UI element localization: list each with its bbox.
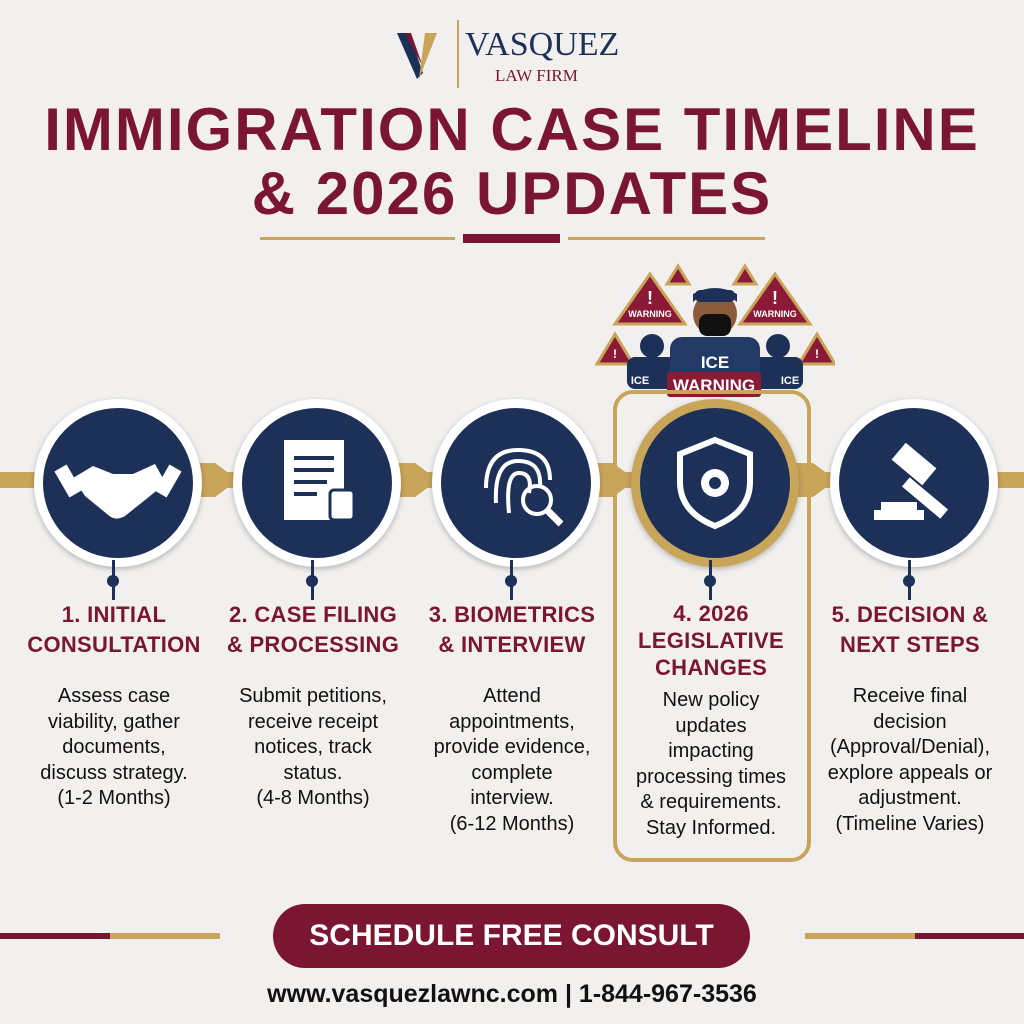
step 4 text bbox=[636, 601, 786, 838]
timeline bar bbox=[0, 472, 1024, 488]
step 4 icon: shield bbox=[631, 399, 799, 567]
step 4 text: CHANGES bbox=[655, 655, 767, 680]
step 3 text: & INTERVIEW bbox=[438, 632, 586, 657]
step 3 text: complete bbox=[471, 762, 553, 784]
step 2 text: Submit petitions, bbox=[239, 685, 387, 707]
step 5 icon: gavel bbox=[830, 399, 998, 567]
step 4 text: processing times bbox=[636, 766, 786, 788]
ICE warning illustration: ICE bbox=[701, 353, 729, 372]
step 1 text: discuss strategy. bbox=[40, 762, 188, 784]
ICE warning illustration: WARNING bbox=[673, 376, 755, 395]
ICE warning illustration: ! bbox=[613, 347, 617, 361]
step 4 text: impacting bbox=[668, 740, 754, 762]
step 4 text: 4. 2026 bbox=[673, 601, 749, 626]
footer contact: www.vasquezlawnc.com | 1-844-967-3536 bbox=[267, 980, 757, 1008]
logo bbox=[397, 20, 619, 88]
step 1 text: documents, bbox=[62, 736, 166, 758]
step 3 text: 3. BIOMETRICS bbox=[429, 602, 595, 627]
title bbox=[44, 96, 980, 227]
highlight box: step 4 bbox=[613, 390, 811, 862]
title: IMMIGRATION CASE TIMELINE bbox=[44, 96, 980, 163]
step 5 text: (Timeline Varies) bbox=[836, 812, 984, 834]
step 3 text: Attend bbox=[483, 685, 541, 707]
ICE warning illustration: WARNING bbox=[753, 309, 797, 319]
step 2 text: (4-8 Months) bbox=[256, 787, 370, 809]
step 2 text bbox=[227, 602, 399, 809]
step 3 icon: fingerprint bbox=[432, 399, 600, 567]
step 5 text: NEXT STEPS bbox=[840, 632, 980, 657]
step 1 text: viability, gather bbox=[48, 710, 180, 732]
step 4 text: New policy bbox=[663, 689, 759, 711]
logo: VASQUEZ bbox=[465, 26, 619, 63]
step 2 text: 2. CASE FILING bbox=[229, 602, 397, 627]
step 4 text: LEGISLATIVE bbox=[638, 628, 784, 653]
arrows bbox=[200, 463, 825, 497]
step 3 text: interview. bbox=[470, 787, 554, 809]
step 3 text bbox=[429, 602, 595, 834]
step 1 text: 1. INITIAL bbox=[62, 602, 166, 627]
step 3 text: (6-12 Months) bbox=[450, 812, 574, 834]
step 4 text: Stay Informed. bbox=[646, 816, 776, 838]
step 2 icon: document bbox=[233, 399, 401, 567]
step 5 text: Receive final bbox=[853, 685, 967, 707]
step 5 text: (Approval/Denial), bbox=[830, 736, 990, 758]
CTA button bbox=[273, 904, 750, 968]
step 1 icon: handshake bbox=[34, 399, 202, 567]
step 1 text: (1-2 Months) bbox=[57, 787, 171, 809]
step 4 text: & requirements. bbox=[640, 791, 782, 813]
step 1 text: Assess case bbox=[58, 685, 170, 707]
ICE warning illustration: ! bbox=[647, 288, 653, 308]
ICE warning illustration: ICE bbox=[781, 375, 799, 387]
step 5 text bbox=[828, 602, 992, 834]
step 5 text: 5. DECISION & bbox=[832, 602, 988, 627]
step 5 text: adjustment. bbox=[858, 787, 962, 809]
step 5 text: decision bbox=[873, 710, 947, 732]
step 4 text: updates bbox=[675, 714, 747, 736]
step 1 text bbox=[27, 602, 201, 809]
step 3 text: appointments, bbox=[449, 710, 575, 732]
step 3 text: provide evidence, bbox=[434, 736, 590, 758]
ICE warning illustration: ICE bbox=[631, 375, 649, 387]
step 1 text: CONSULTATION bbox=[27, 632, 201, 657]
step 2 text: & PROCESSING bbox=[227, 632, 399, 657]
stems bbox=[112, 560, 115, 600]
logo: LAW FIRM bbox=[495, 66, 578, 85]
ICE warning illustration: ! bbox=[815, 347, 819, 361]
side lines bbox=[0, 933, 110, 939]
ICE warning illustration: WARNING bbox=[628, 309, 672, 319]
title: & 2026 UPDATES bbox=[252, 160, 772, 227]
step 5 text: explore appeals or bbox=[828, 762, 992, 784]
step 2 text: status. bbox=[284, 762, 342, 784]
step 2 text: notices, track bbox=[254, 736, 372, 758]
CTA button: SCHEDULE FREE CONSULT bbox=[309, 919, 714, 952]
title divider bbox=[260, 234, 765, 243]
ICE warning illustration bbox=[595, 263, 835, 397]
ICE warning illustration: ! bbox=[772, 288, 778, 308]
step 2 text: receive receipt bbox=[248, 710, 378, 732]
